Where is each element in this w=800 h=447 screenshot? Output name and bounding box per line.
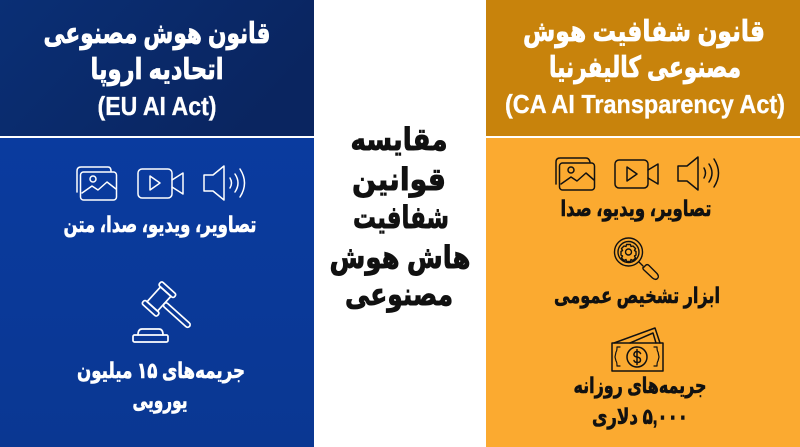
label: daily fines: [574, 373, 706, 429]
EU panel body background: [0, 138, 314, 447]
title: center comparison: مقایسه: [350, 122, 448, 157]
label: daily fines: ۵,۰۰۰ دلاری: [592, 404, 688, 429]
label: fines in euros: [77, 358, 245, 414]
heading: EU AI Act: (EU AI Act): [98, 91, 216, 121]
heading: EU AI Act: اتحادیه اروپا: [90, 54, 224, 87]
title: center comparison: [330, 122, 470, 313]
icon: images: [556, 158, 594, 190]
heading: CA AI Transparency Act: مصنوعی کالیفرنیا: [549, 52, 741, 84]
title: center comparison: هاش هوش: [330, 240, 470, 276]
title: center comparison: شفافیت: [353, 200, 449, 235]
label: daily fines: جریمه‌های روزانه: [574, 373, 706, 399]
icon: video: [615, 160, 658, 188]
icon: gavel: [133, 281, 200, 342]
label: media types: تصاویر، ویدیو، صدا: [560, 196, 712, 222]
title: center comparison: مصنوعی: [345, 277, 453, 313]
panel: CA AI Transparency Act: [486, 0, 800, 447]
icon: speaker: [204, 166, 244, 200]
icon: images: [77, 167, 116, 200]
panel: EU AI Act: [0, 0, 314, 447]
CA panel body background: [486, 138, 800, 447]
icon: money: [612, 328, 663, 371]
icon: speaker: [678, 157, 718, 190]
title: center comparison: قوانین: [352, 162, 446, 198]
icon: magnifier with gear: [614, 238, 658, 279]
label: media types: تصاویر، ویدیو، صدا، متن: [64, 212, 256, 238]
EU panel header background: [0, 0, 314, 136]
label: public detection tool: ابزار تشخیص عمومی: [554, 283, 720, 309]
heading: EU AI Act: قانون هوش مصنوعی: [44, 18, 270, 50]
label: fines in euros: یورویی: [132, 388, 188, 414]
heading: CA AI Transparency Act: [505, 16, 785, 119]
CA panel header background: [486, 0, 800, 136]
heading: EU AI Act: [44, 18, 270, 121]
label: fines in euros: جریمه‌های ۱۵ میلیون: [77, 358, 245, 384]
icon: video: [138, 169, 183, 198]
